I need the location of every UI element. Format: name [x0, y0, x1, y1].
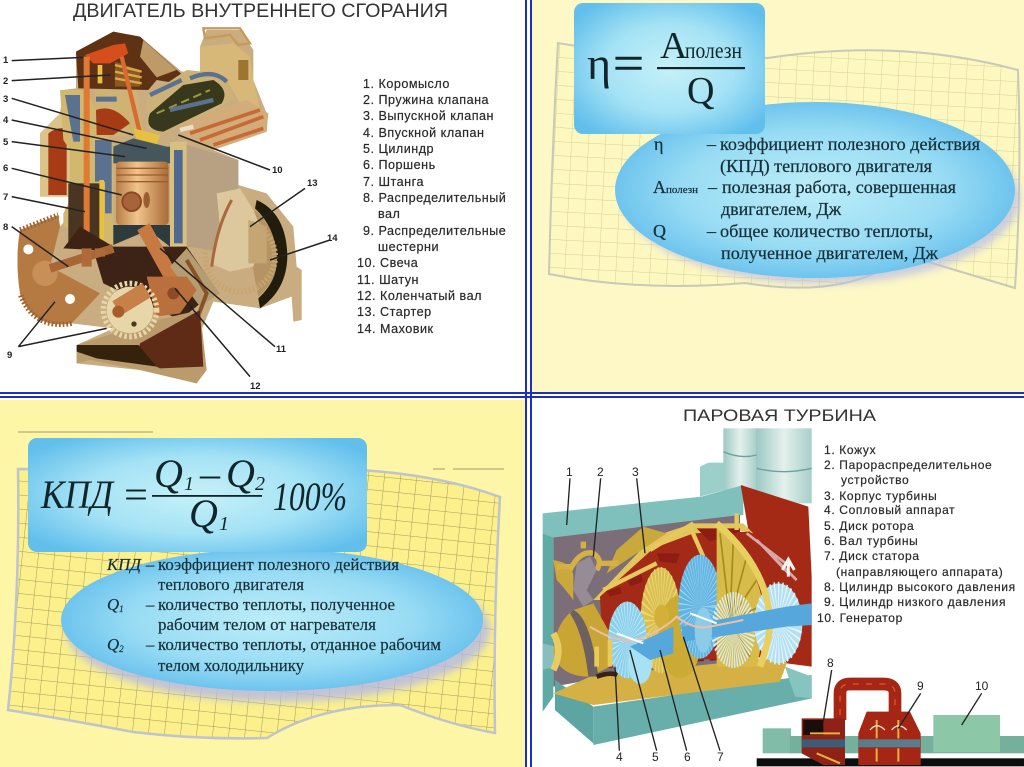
turbine parts legend: 4. Сопловый аппарат — [824, 503, 955, 517]
mesh sheet — [8, 469, 500, 738]
engine parts legend: 7. Штанга — [363, 175, 424, 189]
engine parts legend: 8. Распределительный — [363, 191, 506, 205]
turbine parts legend: 3. Корпус турбины — [824, 489, 937, 503]
callout ellipse: definitions: (КПД) теплового двигателя — [720, 156, 932, 177]
callout ellipse: definitions: Аполезн — [653, 177, 698, 197]
heading: turbine title: ПАРОВАЯ ТУРБИНА — [683, 406, 877, 425]
engine parts legend: 6. Поршень — [363, 158, 436, 172]
callout ellipse: definitions: Q — [653, 221, 666, 241]
panel: steam turbine — [543, 406, 1024, 766]
engine callout lines and numbers: 10 — [272, 165, 283, 176]
callout ellipse: definitions: коэффициент полезного действия — [158, 555, 399, 574]
engine parts legend: 5. Цилиндр — [363, 142, 434, 156]
engine cutaway illustration — [17, 28, 302, 383]
formula box: eta: = — [613, 35, 644, 91]
callout ellipse: definitions: – — [706, 221, 717, 241]
panel: efficiency formula — [549, 3, 1020, 288]
turbine callout lines and numbers: 4 — [616, 750, 623, 764]
engine parts legend: шестерни — [378, 240, 439, 254]
turbine callout lines and numbers: 5 — [652, 750, 659, 764]
engine callout lines and numbers: 9 — [7, 350, 12, 361]
turbine parts legend: 8. Цилиндр высокого давления — [824, 580, 1016, 594]
turbine parts legend: 1. Кожух — [824, 443, 876, 457]
engine callout lines and numbers: 6 — [3, 163, 8, 174]
formula box: eta: А — [660, 25, 688, 67]
callout ellipse: definitions: – — [145, 635, 155, 654]
formula box: eta: полезн — [685, 38, 742, 63]
turbine callout lines and numbers: 3 — [632, 465, 639, 479]
engine callout lines and numbers: 1 — [3, 55, 9, 66]
turbine cutaway illustration — [543, 428, 1024, 766]
engine parts legend: 11. Шатун — [357, 273, 419, 287]
formula box: KPD: 100% — [273, 474, 347, 519]
mesh sheet — [549, 43, 1019, 288]
engine callout lines and numbers: 7 — [3, 192, 8, 203]
turbine callout lines and numbers: 1 — [566, 465, 573, 479]
callout ellipse: definitions: Q — [107, 595, 119, 614]
callout ellipse: definitions — [61, 549, 490, 702]
formula box: KPD: КПД — [40, 472, 115, 517]
callout ellipse: definitions: теплового двигателя — [158, 575, 304, 594]
engine callout lines and numbers: 12 — [250, 381, 261, 392]
turbine callout lines and numbers: 9 — [917, 679, 924, 693]
callout ellipse: definitions: КПД — [106, 555, 142, 574]
turbine parts legend: 10. Генератор — [817, 611, 903, 625]
callout ellipse: definitions: количество теплоты, полученное — [158, 595, 395, 614]
formula box: eta — [574, 3, 765, 134]
callout ellipse: definitions: 2 — [119, 644, 124, 654]
formula box: KPD: 1 — [219, 513, 229, 535]
formula box: KPD: Q — [226, 451, 255, 496]
formula box: KPD: = — [124, 472, 148, 517]
callout ellipse: definitions: полезная работа, совершенная — [722, 177, 956, 197]
turbine parts legend: (направляющего аппарата) — [836, 565, 1003, 579]
callout ellipse: definitions: полученное двигателем, Дж — [721, 243, 939, 263]
turbine parts legend: 2. Парораспределительное — [824, 458, 992, 472]
engine parts legend: вал — [378, 207, 400, 221]
engine callout lines and numbers: 5 — [3, 137, 9, 148]
callout ellipse: definitions: телом холодильнику — [158, 656, 305, 675]
engine callout lines and numbers: 14 — [327, 233, 338, 244]
turbine callout lines and numbers: 10 — [975, 679, 989, 693]
engine parts legend: 2. Пружина клапана — [363, 93, 489, 107]
engine parts legend: 1. Коромысло — [363, 77, 450, 91]
callout ellipse: definitions: рабочим телом от нагревателя — [158, 615, 376, 634]
engine callout lines and numbers: 8 — [3, 222, 8, 233]
formula box: KPD: – — [199, 451, 221, 496]
engine parts legend: 13. Стартер — [357, 305, 432, 319]
turbine parts legend: 7. Диск статора — [824, 549, 920, 563]
callout ellipse: definitions: двигателем, Дж — [721, 199, 842, 219]
engine parts legend: 14. Маховик — [357, 322, 434, 336]
turbine parts legend: 9. Цилиндр низкого давления — [824, 595, 1006, 609]
callout ellipse: definitions: общее количество теплоты, — [720, 221, 933, 241]
engine callout lines and numbers — [3, 55, 338, 392]
formula box: KPD: 1 — [184, 473, 194, 495]
callout ellipse: definitions: коэффициент полезного действия — [720, 134, 980, 154]
turbine parts legend: 5. Диск ротора — [824, 519, 914, 533]
formula box: KPD — [28, 438, 367, 552]
turbine callout lines and numbers: 2 — [597, 465, 604, 479]
callout ellipse: definitions: – — [707, 177, 718, 197]
formula box: KPD: Q — [189, 491, 218, 536]
turbine callout lines and numbers: 8 — [827, 656, 834, 670]
engine parts legend: 12. Коленчатый вал — [357, 289, 482, 303]
turbine callout lines and numbers — [566, 465, 989, 764]
turbine parts legend: устройство — [841, 473, 909, 487]
engine parts legend: 10. Свеча — [357, 256, 418, 270]
turbine callout lines and numbers: 7 — [717, 750, 724, 764]
engine callout lines and numbers: 4 — [3, 115, 9, 126]
callout ellipse: definitions: η — [654, 134, 663, 154]
callout ellipse: definitions: – — [145, 595, 155, 614]
callout ellipse: definitions: – — [706, 134, 717, 154]
callout ellipse: definitions: 1 — [119, 604, 124, 614]
turbine callout lines and numbers: 6 — [684, 750, 691, 764]
formula box: KPD: 2 — [255, 473, 265, 495]
engine callout lines and numbers: 13 — [307, 178, 318, 189]
panel: internal combustion engine — [3, 0, 506, 392]
turbine parts legend: 6. Вал турбины — [824, 534, 918, 548]
callout ellipse: definitions — [615, 102, 1020, 284]
formula box: eta: η — [587, 38, 611, 89]
formula box: KPD: Q — [154, 451, 183, 496]
decorative thin rule — [18, 432, 504, 469]
heading: engine title: ДВИГАТЕЛЬ ВНУТРЕННЕГО СГОРАНИЯ — [73, 0, 448, 22]
engine callout lines and numbers: 11 — [276, 344, 287, 355]
engine parts legend — [357, 77, 506, 336]
engine parts legend: 3. Выпускной клапан — [363, 109, 494, 123]
callout ellipse: definitions: количество теплоты, отданное рабочим — [158, 635, 441, 654]
engine parts legend: 9. Распределительные — [363, 224, 506, 238]
engine callout lines and numbers: 2 — [3, 76, 8, 87]
callout ellipse: definitions: – — [145, 555, 155, 574]
engine callout lines and numbers: 3 — [3, 94, 8, 105]
engine parts legend: 4. Впускной клапан — [363, 126, 484, 140]
panel: KPD formula — [8, 432, 504, 738]
turbine parts legend — [817, 443, 1016, 625]
formula box: eta: Q — [687, 70, 714, 112]
callout ellipse: definitions: Q — [107, 635, 119, 654]
